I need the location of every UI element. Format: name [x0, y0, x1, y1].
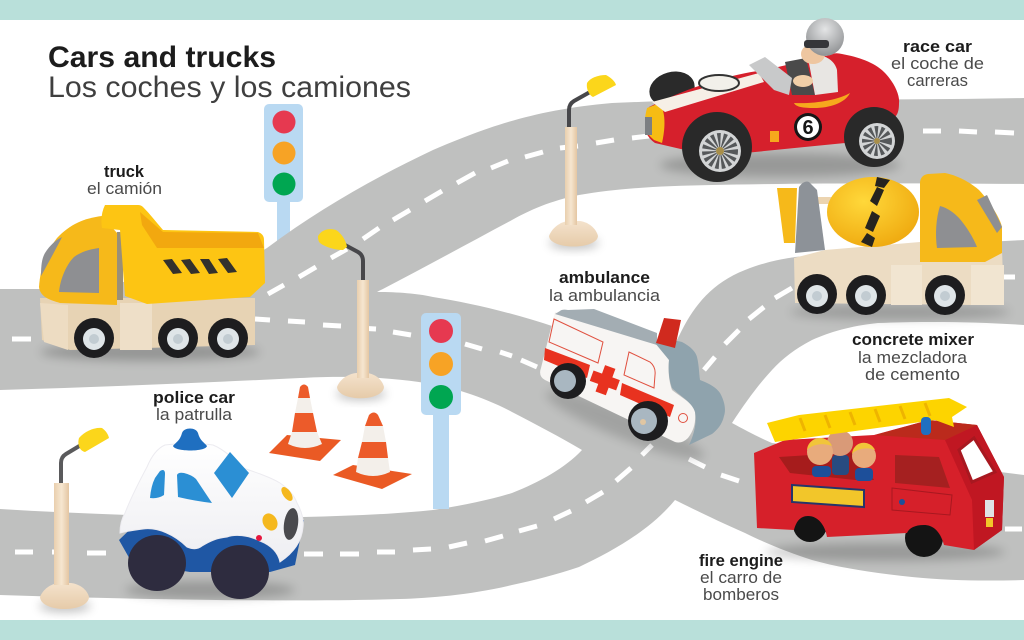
- mixer drum: [827, 177, 919, 247]
- fire engine windscreen: [959, 438, 995, 482]
- label: ambulance: la ambulancia: [549, 286, 661, 305]
- ambulance wheels: [550, 363, 668, 441]
- truck wooden base: [40, 298, 255, 350]
- title: Los coches y los camiones: [48, 71, 411, 104]
- truck cab: [39, 216, 117, 305]
- label: race car: [891, 37, 984, 90]
- fire engine yellow panel: [792, 485, 864, 507]
- fire engine body: [754, 420, 1004, 550]
- traffic cone 2: [333, 412, 412, 489]
- police car siren: [173, 428, 207, 450]
- truck stripes: [163, 258, 237, 274]
- label: ambulance: ambulance: [559, 268, 650, 287]
- fire engine: [754, 398, 1005, 561]
- race car: [645, 18, 904, 182]
- road centre dashes: [12, 131, 1022, 554]
- ambulance beacon: [656, 318, 681, 348]
- label: race car: carreras: [907, 71, 968, 90]
- label: fire engine: bomberos: [703, 585, 779, 604]
- street lamp: middle: [318, 229, 386, 400]
- ambulance: [540, 309, 725, 470]
- label: police car: la patrulla: [156, 405, 233, 424]
- fire engine crew: [807, 430, 876, 481]
- race car windscreen: [749, 57, 792, 95]
- label: fire engine: fire engine: [699, 551, 783, 570]
- truck dump body: [101, 205, 265, 304]
- label: concrete mixer: concrete mixer: [852, 330, 974, 349]
- label: race car: el coche de: [891, 54, 984, 73]
- police car: [119, 428, 304, 599]
- label: truck: truck: [104, 162, 145, 181]
- police car front details: [256, 485, 300, 541]
- fire engine wheels: [793, 508, 943, 557]
- traffic cone 1: [269, 384, 341, 461]
- mixer cab: [920, 173, 1002, 262]
- truck wheels: [74, 318, 248, 358]
- police car wheels: [128, 535, 269, 599]
- top band: [0, 0, 1024, 20]
- label: race car: race car: [903, 37, 972, 56]
- race car number: 6: [802, 117, 814, 139]
- traffic light: lower pole: [421, 313, 461, 509]
- label: concrete mixer: de cemento: [865, 365, 960, 384]
- fire engine ladder: [767, 398, 967, 442]
- concrete mixer: [777, 173, 1010, 320]
- fire engine front plate: [985, 500, 994, 527]
- police car blue skirt: [119, 520, 304, 572]
- truck: [39, 205, 265, 361]
- race car far wheel: [645, 67, 699, 111]
- race car driver: [785, 18, 844, 95]
- street lamp: top: [549, 75, 616, 249]
- label: concrete mixer: [852, 330, 974, 384]
- fire engine door: [892, 488, 952, 515]
- mixer wheels: [797, 274, 965, 315]
- label: police car: [153, 388, 235, 424]
- label: truck: [87, 162, 162, 198]
- mixer wooden base: [794, 242, 1004, 305]
- fire engine beacon: [921, 417, 931, 435]
- label: police car: police car: [153, 388, 235, 407]
- bottom band: [0, 620, 1024, 640]
- street lamp: lower left: [39, 428, 109, 612]
- label: fire engine: el carro de: [700, 568, 782, 587]
- police car windows: [150, 452, 249, 503]
- ambulance body: [540, 312, 695, 442]
- fire engine cab window: [895, 455, 950, 488]
- race car number: [794, 113, 822, 141]
- label: fire engine: [699, 551, 783, 604]
- title: Cars and trucks: [48, 41, 276, 74]
- title: [48, 41, 411, 104]
- label: ambulance: [549, 268, 661, 305]
- mixer rear panel and post: [777, 188, 797, 243]
- police car white body: [120, 444, 303, 562]
- traffic light: upper pole: [264, 104, 303, 250]
- race car wheels: [682, 107, 904, 182]
- road network: [0, 98, 1024, 600]
- fire engine crew bay: [779, 452, 874, 480]
- ambulance markings: [544, 319, 688, 422]
- race car body: [645, 53, 899, 153]
- label: truck: el camión: [87, 179, 162, 198]
- label: concrete mixer: la mezcladora: [858, 348, 968, 367]
